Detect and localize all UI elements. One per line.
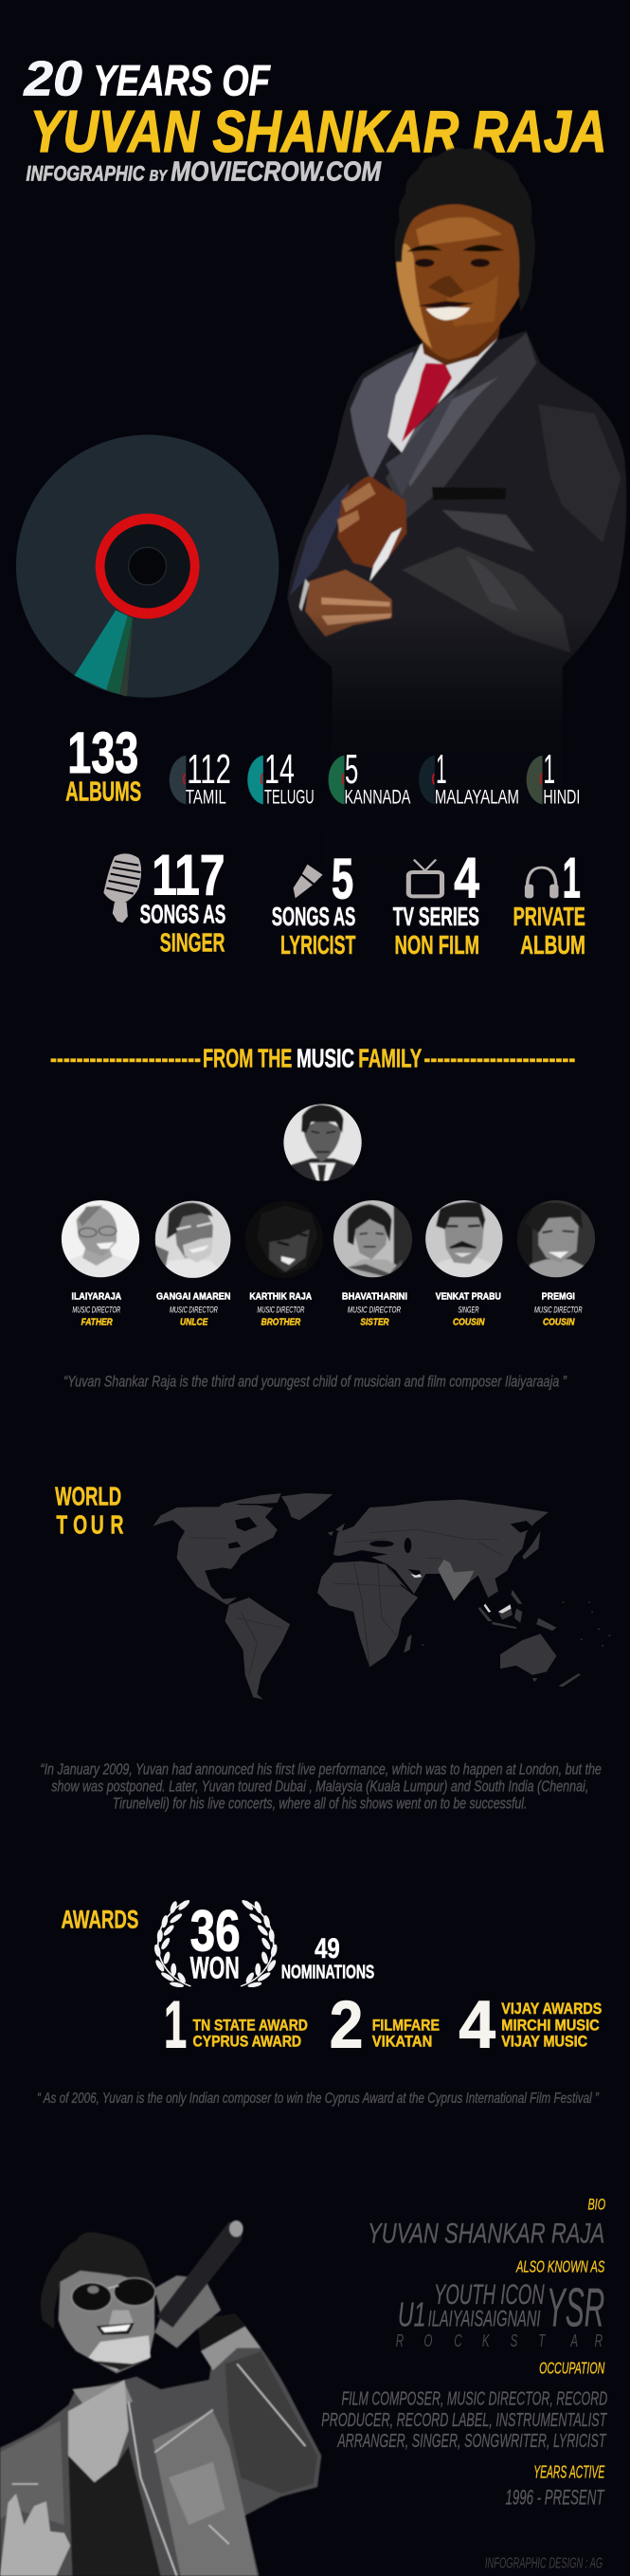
title: 20 years of xyxy=(23,52,271,106)
cuff xyxy=(369,527,402,581)
icon: television xyxy=(408,860,442,896)
award group: 2: VIKATAN xyxy=(372,2034,432,2051)
photo: Premgi xyxy=(516,1199,597,1278)
Hindi: 1 xyxy=(543,746,555,793)
Tamil: 112 xyxy=(187,746,231,793)
member: Karthik Raja: KARTHIK RAJA xyxy=(249,1292,312,1302)
nominations xyxy=(281,1933,374,1982)
microphone xyxy=(156,2221,243,2328)
smile xyxy=(97,2323,135,2335)
total albums: ALBUMS xyxy=(65,776,141,806)
member: Ilaiyaraja xyxy=(71,1292,121,1327)
lower hand xyxy=(0,2494,70,2576)
awards panel xyxy=(37,1898,602,2106)
forearm and watch xyxy=(201,2326,261,2370)
member: Bhavatharini: MUSIC DIRECTOR xyxy=(348,1306,401,1315)
title: name: YUVAN SHANKAR RAJA xyxy=(30,100,606,165)
icon: headphones xyxy=(525,868,558,898)
eyes and brows xyxy=(406,245,504,252)
tv series stat: NON FILM xyxy=(394,930,479,959)
aliases: U1 xyxy=(398,2295,426,2333)
member: Karthik Raja: BROTHER xyxy=(261,1317,301,1327)
award group: 4 xyxy=(459,1987,602,2062)
member: Bhavatharini: SISTER xyxy=(360,1317,389,1327)
heading: FROM THE xyxy=(203,1044,292,1073)
neck and face xyxy=(418,313,502,365)
black tee xyxy=(68,2446,161,2576)
Malayalam xyxy=(419,746,519,809)
world map xyxy=(153,1493,610,1700)
member: Gangai Amaren: MUSIC DIRECTOR xyxy=(170,1306,218,1315)
private album stat xyxy=(513,846,585,959)
portrait: Yuvan in suit xyxy=(287,148,626,883)
shirt xyxy=(387,338,498,452)
member: Premgi xyxy=(534,1292,583,1327)
nominations: 49 xyxy=(315,1933,340,1964)
heading: MUSIC xyxy=(297,1044,354,1073)
heading: TOUR xyxy=(56,1510,123,1541)
photo: Yuvan xyxy=(281,1103,366,1182)
world tour panel xyxy=(40,1481,610,1813)
stats panel xyxy=(65,720,585,959)
jacket xyxy=(0,2348,321,2576)
photo: Venkat Prabu xyxy=(423,1199,504,1278)
face xyxy=(58,2256,154,2373)
Kannada: 5 xyxy=(345,746,358,793)
tour quote xyxy=(40,1762,602,1813)
stats panel: TELUGU xyxy=(264,786,315,809)
vest xyxy=(386,389,458,496)
stats panel: SONGS AS xyxy=(272,902,355,931)
title: 20 years of: 20 xyxy=(23,52,82,106)
award group: 4: VIJAY MUSIC xyxy=(501,2034,587,2051)
award group: 1: 1 xyxy=(164,1987,187,2062)
total albums xyxy=(65,720,141,806)
award group: 2: FILMFARE xyxy=(372,2018,440,2035)
award group: 2 xyxy=(330,1987,440,2062)
aliases: ROCKSTAR xyxy=(396,2331,603,2351)
Tamil xyxy=(170,746,231,809)
disc chart xyxy=(16,435,279,698)
credit line: BY xyxy=(150,169,168,185)
won count: 36 xyxy=(190,1898,241,1963)
occupations xyxy=(321,2388,607,2452)
Kannada xyxy=(329,746,411,809)
singer stat: 117 xyxy=(152,843,225,906)
award group: 2: 2 xyxy=(330,1987,363,2062)
private album stat: 1 xyxy=(563,846,581,910)
member: Gangai Amaren xyxy=(156,1292,230,1327)
portrait: Yuvan singing xyxy=(0,2220,321,2576)
family panel xyxy=(50,1044,597,1391)
member: Bhavatharini: BHAVATHARINI xyxy=(342,1292,407,1302)
photo: Gangai Amaren xyxy=(154,1199,233,1278)
member: Venkat Prabu xyxy=(436,1292,501,1327)
member: Venkat Prabu: VENKAT PRABU xyxy=(436,1292,501,1302)
neck and chest xyxy=(68,2380,129,2482)
singer stat xyxy=(140,843,225,957)
stats panel: TV SERIES xyxy=(393,902,479,931)
lyricist stat xyxy=(272,847,355,959)
award group: 4: 4 xyxy=(459,1987,495,2062)
Tamil: TAMIL xyxy=(186,786,226,809)
title: 20 years of: YEARS OF xyxy=(93,57,271,104)
award group: 1: TN STATE AWARD xyxy=(193,2018,308,2035)
member: Venkat Prabu: COUSIN xyxy=(453,1317,485,1327)
icon: laurel wreath xyxy=(153,1899,279,1988)
hand xyxy=(154,2275,221,2348)
Hindi xyxy=(527,746,580,809)
tv series stat xyxy=(393,846,479,959)
photo: Karthik Raja xyxy=(258,1206,317,1273)
member: Venkat Prabu: SINGER xyxy=(458,1306,479,1315)
stats panel: SONGS AS xyxy=(140,899,225,928)
Malayalam: MALAYALAM xyxy=(435,786,519,809)
bio panel xyxy=(0,2197,607,2576)
Telugu: 14 xyxy=(264,746,295,793)
body fade xyxy=(273,612,630,886)
mouth xyxy=(418,301,474,309)
member: Gangai Amaren: UNLCE xyxy=(180,1317,208,1327)
heading: AWARDS xyxy=(61,1906,138,1933)
Kannada: KANNADA xyxy=(344,786,411,809)
heading xyxy=(55,1481,123,1541)
tie xyxy=(402,363,452,442)
won count: WON xyxy=(190,1951,240,1985)
heading xyxy=(50,1044,575,1073)
member: Premgi: MUSIC DIRECTOR xyxy=(534,1306,583,1315)
bio label: BIO xyxy=(587,2197,605,2214)
award group: 1: CYPRUS AWARD xyxy=(193,2034,301,2051)
credit line xyxy=(27,155,382,187)
zip lines xyxy=(12,2364,305,2576)
photo: Ilaiyaraja xyxy=(61,1199,140,1278)
member: Gangai Amaren: GANGAI AMAREN xyxy=(156,1292,230,1302)
heading: WORLD xyxy=(55,1481,121,1511)
won count xyxy=(190,1898,241,1985)
member: Ilaiyaraja: ILAIYARAJA xyxy=(71,1292,121,1302)
photo: Bhavatharini xyxy=(332,1199,414,1278)
member: Karthik Raja: MUSIC DIRECTOR xyxy=(257,1306,305,1315)
member: Karthik Raja xyxy=(249,1292,312,1327)
nominations: NOMINATIONS xyxy=(281,1961,374,1982)
member: Premgi: PREMGI xyxy=(542,1292,575,1302)
sunglasses xyxy=(71,2283,112,2311)
member: Ilaiyaraja: FATHER xyxy=(81,1317,113,1327)
icon: pen nib xyxy=(294,865,323,898)
Malayalam: 1 xyxy=(436,746,447,793)
singer stat: SINGER xyxy=(160,927,225,957)
hair xyxy=(41,2232,154,2329)
icon: microphone xyxy=(103,853,141,923)
heading: ----------------------- xyxy=(50,1044,201,1073)
tv series stat: 4 xyxy=(454,846,479,910)
credit line: MOVIECROW.COM xyxy=(171,155,382,187)
jacket xyxy=(287,331,626,883)
member: Ilaiyaraja: MUSIC DIRECTOR xyxy=(72,1306,120,1315)
member: Premgi: COUSIN xyxy=(543,1317,575,1327)
hair xyxy=(394,148,535,313)
lyricist stat: 5 xyxy=(332,847,353,910)
Telugu xyxy=(247,746,315,809)
lyricist stat: LYRICIST xyxy=(280,930,355,959)
heading: FAMILY xyxy=(358,1044,422,1073)
Hindi: HINDI xyxy=(543,786,580,809)
aliases xyxy=(396,2277,604,2351)
total albums: 133 xyxy=(67,720,138,785)
header panel xyxy=(16,52,630,886)
award group: 1 xyxy=(164,1987,308,2062)
member: Bhavatharini xyxy=(342,1292,407,1327)
credit line: INFOGRAPHIC xyxy=(27,162,145,186)
lower hand xyxy=(305,570,391,636)
fist xyxy=(337,476,406,570)
